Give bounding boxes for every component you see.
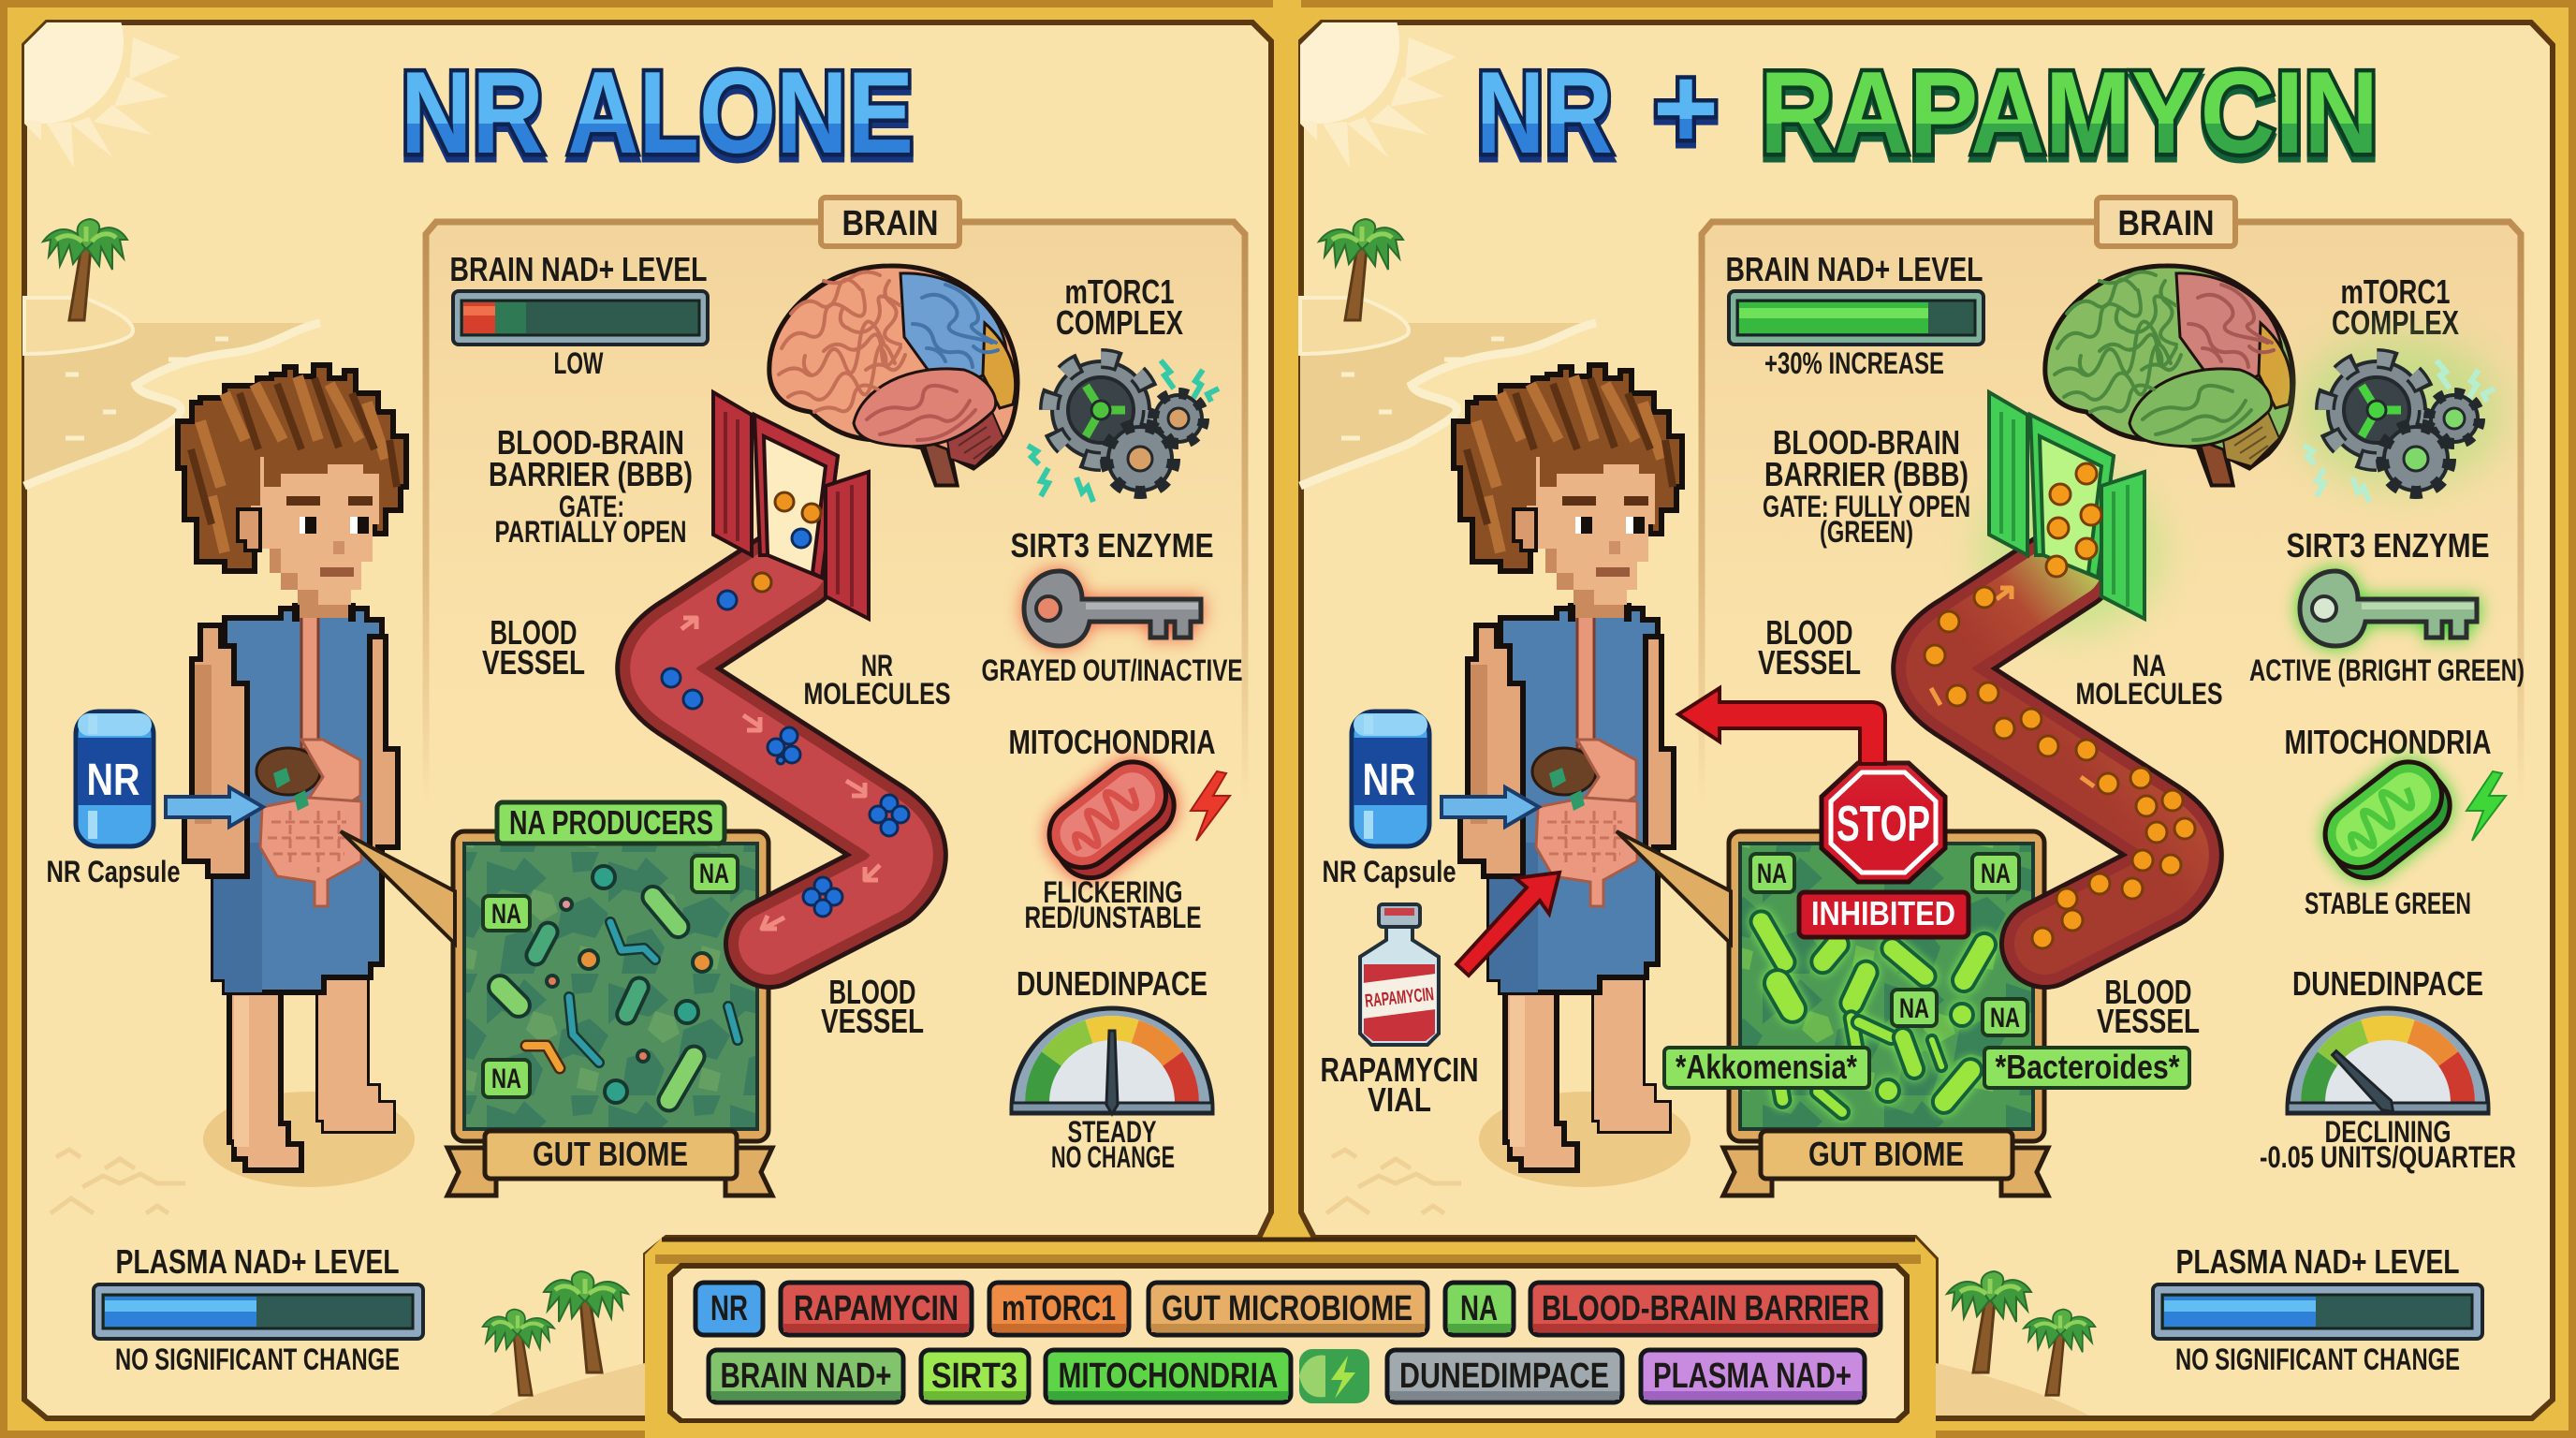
NR molecules label: [803, 649, 951, 711]
NR capsule: [47, 712, 180, 888]
BBB label: BARRIER (BBB): [1764, 455, 1969, 493]
DunedinPACE gauge: -0.05 UNITS/QUARTER: [2260, 1140, 2516, 1174]
NA molecules label: [2076, 649, 2222, 711]
NA molecules label: MOLECULES: [2076, 677, 2222, 711]
sun: [24, 22, 180, 167]
blood vessel label lower: VESSEL: [2097, 1002, 2200, 1040]
SIRT3 enzyme: GRAYED OUT/INACTIVE: [981, 653, 1243, 687]
plasma NAD+ level: PLASMA NAD+ LEVEL: [2175, 1242, 2460, 1281]
brain label: BRAIN: [2117, 204, 2215, 243]
BBB label: [1763, 423, 1970, 549]
callout wedge: gut to biome: [1617, 831, 1731, 944]
gears glow: [2296, 337, 2502, 487]
rapamycin vial: [1360, 904, 1439, 1045]
SIRT3 enzyme: [981, 526, 1243, 687]
legend: dunedimpace: [1387, 1350, 1622, 1402]
stop sign: STOP: [1837, 796, 1930, 852]
NA tags: NA: [699, 858, 729, 889]
NA molecules: [1925, 463, 2195, 948]
rapamycin vial label: [1320, 1050, 1479, 1119]
legend: SIRT3: SIRT3: [931, 1357, 1017, 1396]
mTORC1 label: [2332, 272, 2459, 342]
blood vessel label lower: [2097, 973, 2200, 1040]
panel: gut biome: [447, 802, 772, 1196]
DunedinPACE gauge: [2260, 964, 2516, 1174]
BBB gate: [713, 392, 869, 619]
rapamycin vial: RAPAMYCIN: [1364, 984, 1435, 1012]
arrow: inhibition to brain: [1678, 688, 1885, 764]
species labels: *Bacteroides*: [1996, 1048, 2179, 1086]
gut biome banner: [1723, 1131, 2048, 1196]
mTORC1 label: COMPLEX: [2332, 303, 2459, 342]
rapamycin vial label: VIAL: [1368, 1080, 1431, 1119]
panel: brain region: [423, 198, 1247, 1174]
blood vessel label upper: [482, 613, 585, 682]
mTORC1 label: [1056, 272, 1183, 342]
panel: NR + rapamycin: [1237, 0, 2553, 1418]
NA tags: NA: [1757, 858, 1787, 889]
title: NR: [1476, 49, 1613, 178]
BBB label: GATE:: [559, 490, 624, 523]
NA producers label: NA PRODUCERS: [509, 803, 713, 842]
species labels: *Akkomensia*: [1676, 1048, 1857, 1086]
legend: NR: NR: [710, 1289, 748, 1328]
NA tags: NA: [491, 1064, 521, 1094]
brain illustration: [769, 266, 1017, 485]
BBB label: GATE: FULLY OPEN: [1763, 490, 1970, 523]
blood vessel label upper: BLOOD: [1765, 613, 1853, 652]
title plus sign: +: [1653, 44, 1719, 173]
title rapamycin: RAPAMYCIN: [1760, 49, 2378, 178]
icon: active gears: [2304, 359, 2495, 502]
blood vessel label lower: BLOOD: [829, 973, 915, 1011]
plasma NAD+ level: PLASMA NAD+ LEVEL: [116, 1242, 399, 1281]
beach scenery: [24, 219, 320, 1213]
brain illustration: [2045, 266, 2293, 485]
legend: rapamycin: [781, 1283, 972, 1335]
brain NAD+ gauge: [449, 250, 708, 380]
blood vessel label lower: VESSEL: [821, 1002, 924, 1040]
legend: gut microbiome: [1149, 1283, 1427, 1335]
brain NAD+ gauge: +30% INCREASE: [1764, 346, 1944, 380]
palm trees: [1936, 1271, 2095, 1416]
legend: blood-brain barrier: BLOOD-BRAIN BARRIER: [1542, 1289, 1869, 1328]
mTORC1 label: mTORC1: [1065, 272, 1174, 311]
icon: mitochondria energy: [1299, 1349, 1369, 1403]
legend: blood-brain barrier: [1530, 1283, 1881, 1335]
blood vessel label upper: BLOOD: [490, 613, 577, 652]
mitochondria: RED/UNSTABLE: [1024, 901, 1202, 934]
mitochondria: STABLE GREEN: [2305, 887, 2471, 920]
rapamycin vial label: RAPAMYCIN: [1320, 1050, 1479, 1089]
DunedinPACE gauge: DUNEDINPACE: [2292, 964, 2483, 1003]
panel: gut biome: [1664, 763, 2189, 1196]
NR capsule: NR: [86, 756, 140, 805]
legend: NA: NA: [1460, 1289, 1498, 1328]
panel background: [24, 22, 1271, 1418]
legend: plasma NAD+: PLASMA NAD+: [1653, 1357, 1852, 1396]
legend: mitochondria: MITOCHONDRIA: [1058, 1357, 1279, 1396]
legend: mTORC1: mTORC1: [1002, 1289, 1116, 1328]
plasma NAD+ level: NO SIGNIFICANT CHANGE: [2175, 1343, 2460, 1376]
inhibited label: INHIBITED: [1811, 894, 1955, 932]
mitochondria: MITOCHONDRIA: [2284, 723, 2492, 761]
BBB label: BLOOD-BRAIN: [497, 423, 684, 462]
legend: gut microbiome: GUT MICROBIOME: [1162, 1289, 1412, 1328]
NA tags: NA: [1990, 1003, 2020, 1034]
NR molecules label: MOLECULES: [803, 677, 951, 711]
blood vessel label lower: [821, 973, 924, 1040]
DunedinPACE gauge: STEADY: [1067, 1115, 1157, 1149]
legend: mTORC1: [989, 1283, 1129, 1335]
title: NR ALONE: [401, 49, 914, 178]
legend: SIRT3: [921, 1350, 1029, 1402]
brain label: [821, 198, 959, 246]
panel: NR alone: [0, 0, 1271, 1418]
mitochondria: MITOCHONDRIA: [1009, 723, 1215, 761]
legend: NA: [1445, 1283, 1514, 1335]
blood vessel label upper: [1758, 613, 1861, 682]
legend: brain NAD+: [709, 1350, 903, 1402]
BBB gate open: [1989, 392, 2144, 619]
BBB label: BARRIER (BBB): [489, 455, 693, 493]
beach scenery: [1300, 219, 1596, 1213]
arrow: capsule to gut: [166, 787, 263, 827]
NR capsule: NR Capsule: [1322, 855, 1456, 888]
NR molecules label: NR: [861, 649, 893, 682]
SIRT3 enzyme: [2249, 526, 2525, 687]
BBB label: PARTIALLY OPEN: [494, 515, 687, 549]
NA tags: NA: [491, 899, 521, 930]
NA tags: NA: [1899, 993, 1929, 1024]
mTORC1 label: mTORC1: [2340, 272, 2451, 311]
NA molecules label: NA: [2132, 649, 2166, 682]
BBB label: (GREEN): [1820, 515, 1913, 549]
plasma NAD+ level: [94, 1242, 423, 1376]
mitochondria: [1009, 723, 1230, 934]
blood vessel label lower: BLOOD: [2104, 973, 2192, 1011]
blood vessel label upper: VESSEL: [1758, 643, 1861, 682]
palm trees: [483, 1271, 645, 1416]
SIRT3 enzyme: SIRT3 ENZYME: [2286, 526, 2490, 565]
DunedinPACE gauge: NO CHANGE: [1051, 1140, 1175, 1174]
brain NAD+ gauge: LOW: [554, 346, 604, 380]
panel: legend: [645, 1238, 1936, 1438]
legend: rapamycin: RAPAMYCIN: [794, 1289, 959, 1328]
plasma NAD+ level: NO SIGNIFICANT CHANGE: [115, 1343, 400, 1376]
legend: mitochondria: [1046, 1350, 1291, 1402]
legend: dunedimpace: DUNEDIMPACE: [1399, 1357, 1609, 1396]
icon: mTORC1 gears: [1028, 359, 1219, 502]
brain NAD+ gauge: BRAIN NAD+ LEVEL: [1726, 250, 1983, 288]
panel: brain region: [1699, 198, 2525, 1174]
SIRT3 enzyme: SIRT3 ENZYME: [1011, 526, 1213, 565]
mitochondria: FLICKERING: [1043, 875, 1183, 909]
brain label: [2097, 198, 2235, 246]
species labels: [1664, 1048, 2189, 1088]
blood vessel: [1931, 566, 2178, 944]
NR molecules: [662, 492, 909, 917]
NA tags: NA: [1981, 858, 2011, 889]
brain NAD+ gauge: [1726, 250, 1983, 380]
callout wedge: gut to biome: [341, 831, 455, 944]
BBB label: BLOOD-BRAIN: [1773, 423, 1960, 462]
character with organs: [1454, 365, 1690, 1187]
DunedinPACE gauge: [1012, 964, 1212, 1174]
NR capsule: [1322, 712, 1456, 888]
NR capsule: NR Capsule: [47, 855, 180, 888]
gut biome banner: GUT BIOME: [1808, 1135, 1964, 1173]
blood vessel: [661, 566, 902, 944]
gate glow: [1983, 473, 2160, 632]
mTORC1 label: COMPLEX: [1056, 303, 1183, 342]
DunedinPACE gauge: DUNEDINPACE: [1017, 964, 1208, 1003]
gut biome banner: GUT BIOME: [533, 1135, 688, 1173]
sun: [1300, 22, 1456, 167]
bacteria: [484, 866, 711, 1114]
DunedinPACE gauge: DECLINING: [2325, 1115, 2451, 1149]
panel background: [1301, 22, 2553, 1418]
brain label: BRAIN: [842, 204, 938, 243]
gut biome banner: [447, 1131, 772, 1196]
arrow: capsule to gut: [1442, 787, 1539, 827]
brain NAD+ gauge: BRAIN NAD+ LEVEL: [449, 250, 708, 288]
bright bacteria: [1747, 907, 1999, 1122]
legend: plasma NAD+: [1641, 1350, 1865, 1402]
mitochondria: [2284, 723, 2506, 920]
plasma NAD+ level: [2153, 1242, 2482, 1376]
stop sign: [1822, 763, 1945, 882]
arrow: rapamycin to gut: [1456, 873, 1559, 976]
NR capsule: NR: [1363, 756, 1415, 805]
legend: NR: [695, 1283, 763, 1335]
blood vessel label upper: VESSEL: [482, 643, 585, 682]
BBB label: [489, 423, 693, 549]
legend: brain NAD+: BRAIN NAD+: [721, 1357, 891, 1396]
character with organs: [178, 365, 415, 1187]
NA tags: [1750, 854, 2027, 1035]
NA tags: [483, 856, 738, 1097]
